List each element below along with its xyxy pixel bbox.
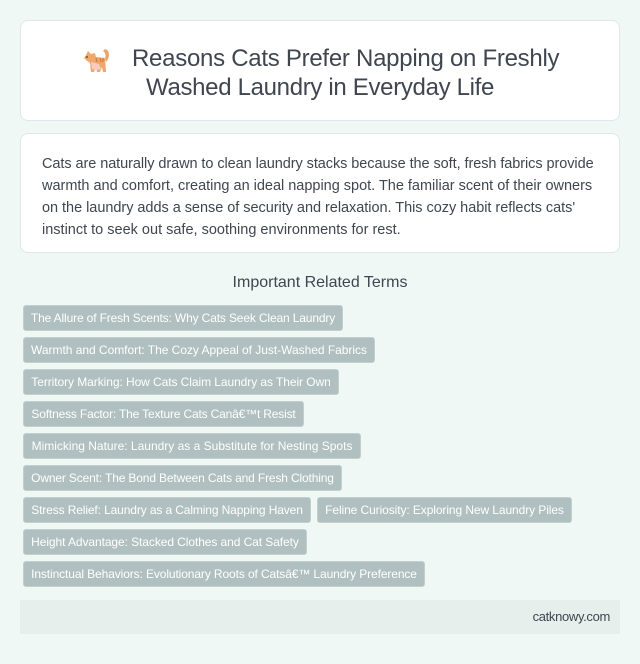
heading: title line 1: Reasons Cats Prefer Napping on Freshly bbox=[132, 45, 559, 72]
tag bbox=[23, 433, 361, 459]
tag bbox=[23, 305, 343, 331]
tag bbox=[317, 497, 572, 523]
text: description bbox=[42, 156, 594, 238]
tag bbox=[23, 497, 311, 523]
text: description: instinct to seek out safe, soothing environments for rest. bbox=[42, 222, 401, 238]
tag bbox=[23, 465, 342, 491]
icon: cat bbox=[84, 49, 109, 72]
tag bbox=[23, 529, 307, 555]
tag: Owner Scent: The Bond Between Cats and Fresh Clothing bbox=[31, 471, 334, 485]
tags list bbox=[23, 305, 572, 587]
tag: Softness Factor: The Texture Cats Canâ€™t Resist bbox=[31, 407, 296, 421]
tag bbox=[23, 561, 425, 587]
tag: Stress Relief: Laundry as a Calming Napping Haven bbox=[31, 503, 303, 517]
tag: Height Advantage: Stacked Clothes and Cat Safety bbox=[31, 535, 299, 549]
heading: related terms: Important Related Terms bbox=[233, 274, 407, 291]
tag: Feline Curiosity: Exploring New Laundry Piles bbox=[325, 503, 564, 517]
tag: Mimicking Nature: Laundry as a Substitute for Nesting Spots bbox=[32, 439, 352, 453]
panel: title card bbox=[20, 20, 620, 121]
panel: description card bbox=[20, 133, 620, 253]
text: description: on the laundry adds a sense of security and relaxation. This cozy habit reflects cats' bbox=[42, 200, 575, 216]
tag bbox=[23, 401, 304, 427]
tag bbox=[23, 369, 339, 395]
tag: Territory Marking: How Cats Claim Laundry as Their Own bbox=[31, 375, 331, 389]
tag: Warmth and Comfort: The Cozy Appeal of Just-Washed Fabrics bbox=[31, 343, 367, 357]
tag: The Allure of Fresh Scents: Why Cats Seek Clean Laundry bbox=[31, 311, 335, 325]
text: description: Cats are naturally drawn to clean laundry stacks because the soft, fresh fabrics provide bbox=[42, 156, 594, 172]
footer bar bbox=[20, 600, 620, 634]
text: description: warmth and comfort, creating an ideal napping spot. The familiar scent of their owners bbox=[42, 178, 592, 194]
footer: site name: catknowy.com bbox=[533, 609, 610, 624]
tag bbox=[23, 337, 375, 363]
heading: title line 2: Washed Laundry in Everyday Life bbox=[146, 74, 494, 101]
tag: Instinctual Behaviors: Evolutionary Roots of Catsâ€™ Laundry Preference bbox=[31, 567, 417, 581]
